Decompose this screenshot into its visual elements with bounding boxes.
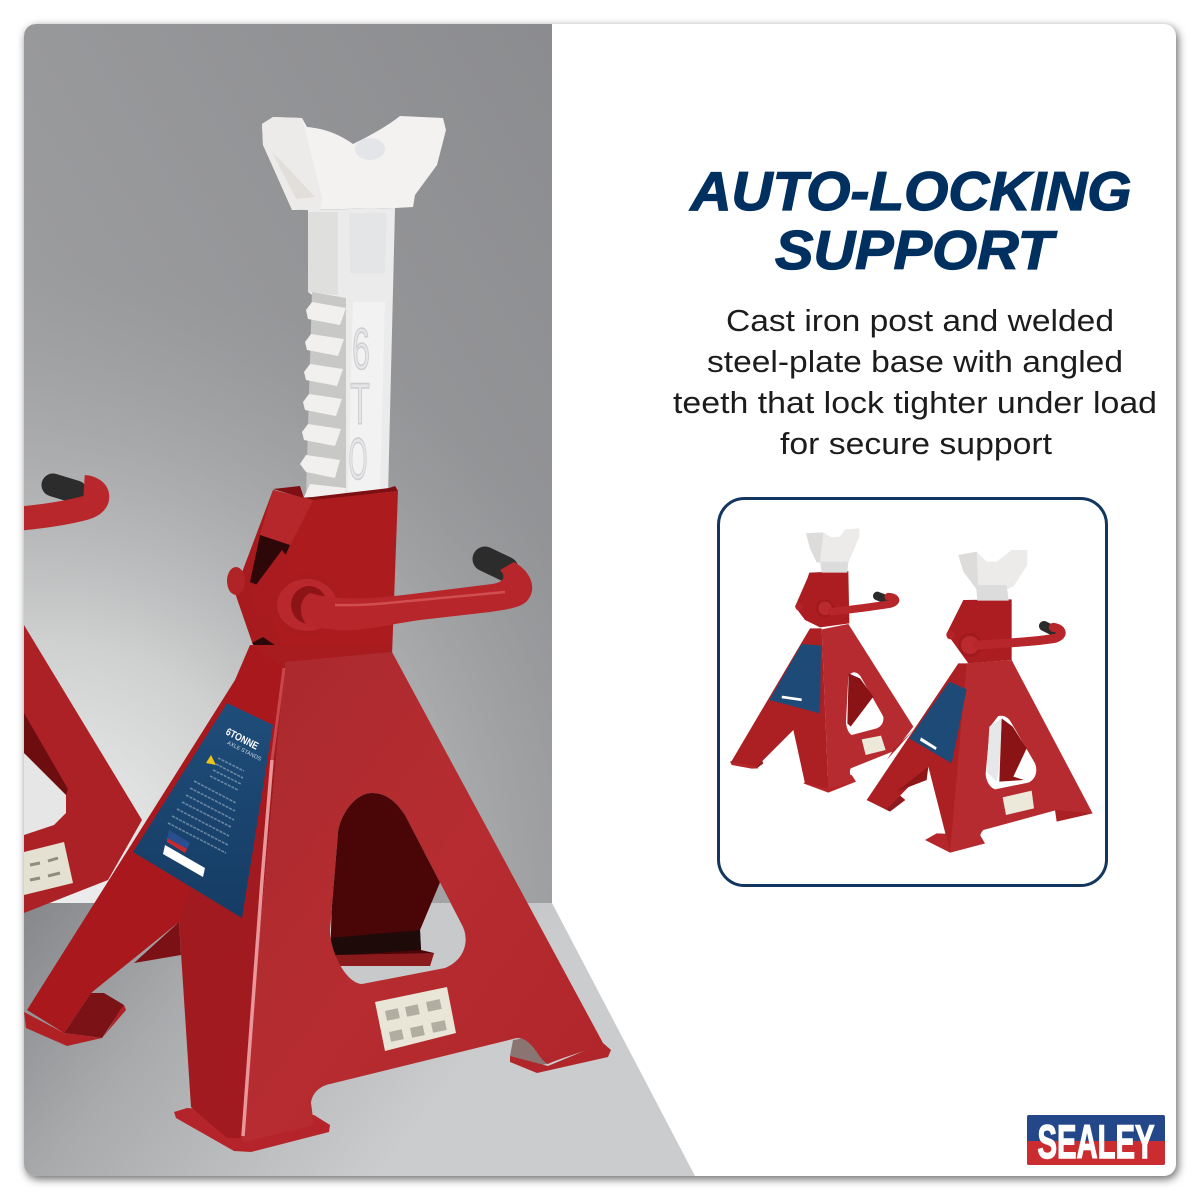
stand base [24,645,611,1152]
second stand handle [15,487,97,519]
embossed post lettering [349,327,370,480]
fold highlight [272,668,284,760]
body text: Cast iron post and welded [726,303,1114,338]
front face [241,652,603,1142]
stand head socket [227,486,398,666]
heading: AUTO-LOCKING [688,160,1132,222]
triangular cut-out [330,793,466,984]
navy safety label [133,703,273,918]
navy safety label: AXLE STANDS [226,740,262,763]
body text: for secure support [780,426,1052,461]
inset stand: left [730,528,915,793]
saddle head [262,116,446,210]
weld band [250,645,286,660]
inner strip [179,714,280,1138]
backdrop wall [24,24,552,904]
right foot plate [510,1038,548,1066]
hub cylinder [256,550,286,590]
socket opening [250,535,290,590]
socket rim [273,486,398,501]
second stand behind, partly cropped [15,485,181,963]
heading: SUPPORT [775,219,1058,281]
socket front face [282,491,398,652]
embossed post lettering: O [349,428,367,492]
inset stand: right [867,550,1093,853]
body text [673,303,1157,461]
back leg dark side [64,993,124,1038]
second stand sticker [24,842,73,895]
ratchet teeth [306,292,346,496]
stand handle [301,559,532,630]
left wing [27,645,287,1033]
inset panel: pair of axle stands [718,498,1106,886]
rating sticker [375,987,456,1051]
black handle grip [485,559,506,569]
post shaft [308,208,395,496]
pin stub [227,567,245,595]
main stand post [262,116,446,497]
label logo and white strip [168,830,190,849]
socket left plate [235,490,313,650]
body text: steel-plate base with angled [707,344,1123,379]
embossed post lettering: T [350,372,370,436]
backdrop floor [24,903,695,1176]
washer ring [272,574,342,636]
warning triangle [206,755,216,765]
front foot plate [174,1108,330,1152]
heading [688,160,1132,281]
second stand grip [53,485,76,492]
body text: teeth that lock tighter under load [673,385,1157,420]
navy safety label: 6TONNE [224,726,260,753]
left foot plate [24,1005,126,1046]
photo panel: axle stand on grey background [15,24,695,1176]
embossed post lettering: 6 [352,317,370,381]
